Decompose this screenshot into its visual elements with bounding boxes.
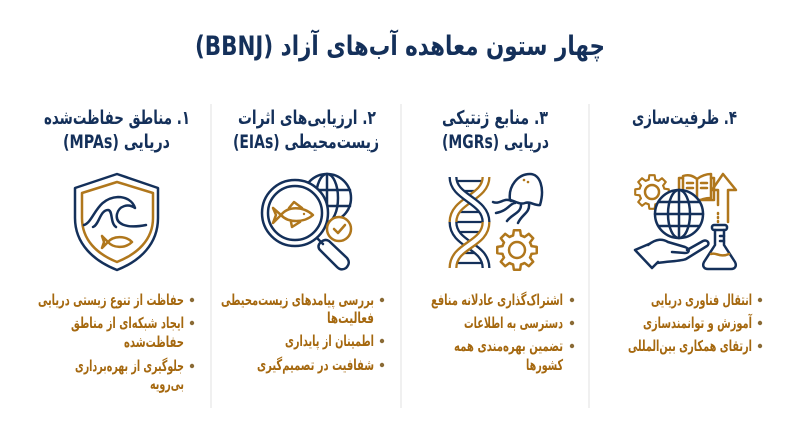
heading: MPAs xyxy=(44,107,190,153)
heading: capacity building: ۴. ظرفیت‌سازی xyxy=(632,107,737,129)
list: MGR points: تضمین بهره‌مندی همه xyxy=(454,337,563,355)
list: EIA points xyxy=(221,291,384,374)
heading: MGRs: ۳. منابع ژنتیکی xyxy=(442,107,548,129)
heading: MGRs: دریایی (MGRs) xyxy=(442,131,549,153)
icon: magnifier over globe with fish xyxy=(262,174,351,269)
list: EIA points: فعالیت‌ها xyxy=(327,309,374,327)
list: MGR points: اشتراک‌گذاری عادلانه منافع xyxy=(431,291,563,309)
panel: capacity building xyxy=(628,107,762,355)
panel: environmental impact assessments xyxy=(221,107,384,374)
list: MGR points: دسترسی به اطلاعات xyxy=(464,314,563,332)
panel: marine protected areas xyxy=(38,107,194,393)
list: MPA points xyxy=(38,291,194,393)
list: MPA points: ایجاد شبکه‌ای از مناطق xyxy=(71,314,184,332)
list: MGR points: کشورها xyxy=(526,356,563,374)
list: MPA points: حفاظت از تنوع زیستی دریایی xyxy=(38,291,184,309)
list: EIA points: بررسی پیامدهای زیست‌محیطی xyxy=(221,291,374,310)
heading: MPAs: ۱. مناطق حفاظت‌شده xyxy=(44,107,190,129)
icon: DNA helix, jellyfish and gear xyxy=(453,174,542,270)
title: چهار ستون معاهده آب‌های آزاد (BBNJ) xyxy=(195,29,605,62)
list: MPA points: بی‌رویه xyxy=(150,375,184,393)
heading: EIAs: ۲. ارزیابی‌های اثرات xyxy=(238,107,376,129)
icon: globe on hand with gear, book, arrow and flask xyxy=(635,174,736,269)
list: capacity building points xyxy=(628,291,762,355)
heading: MPAs: دریایی (MPAs) xyxy=(63,131,170,153)
list: MPA points: حفاظت‌شده xyxy=(124,333,184,351)
heading: MGRs xyxy=(442,107,549,153)
heading: EIAs xyxy=(233,107,379,153)
panel: marine genetic resources xyxy=(431,107,574,374)
list: EIA points: اطمینان از پایداری xyxy=(285,332,374,351)
icon: shield with wave and fish xyxy=(75,174,158,270)
list: MGR points xyxy=(431,291,574,374)
list: EIA points: شفافیت در تصمیم‌گیری xyxy=(257,356,374,374)
heading: EIAs: زیست‌محیطی (EIAs) xyxy=(233,131,379,153)
list: MPA points: جلوگیری از بهره‌برداری xyxy=(75,357,184,375)
